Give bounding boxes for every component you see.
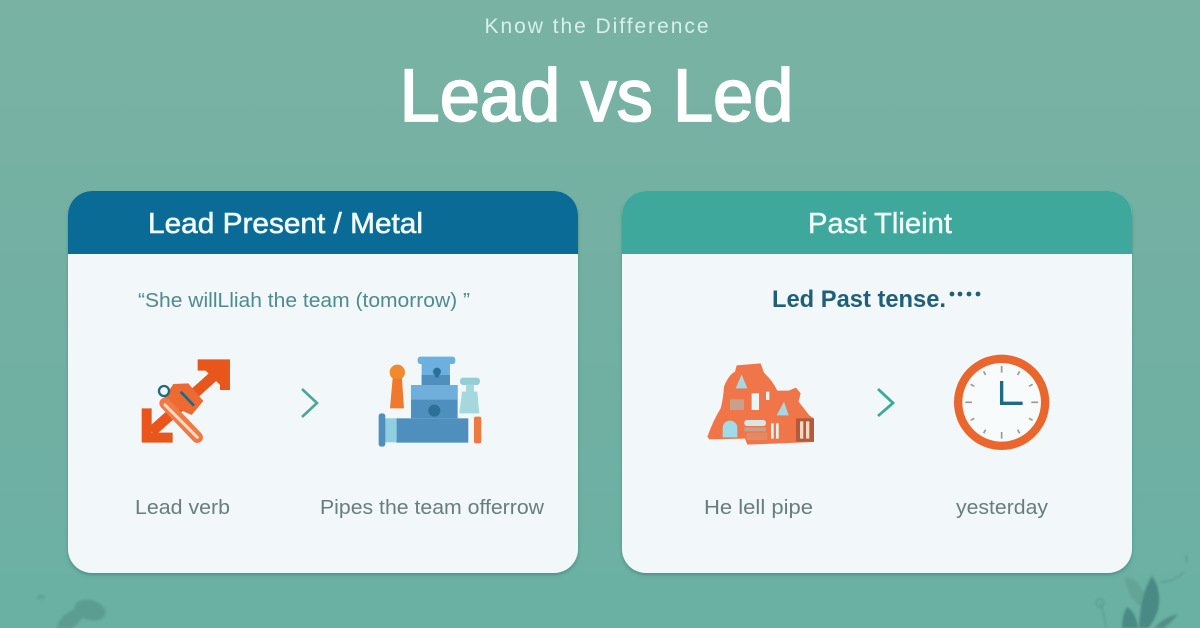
- label: yesterday: yesterday: [956, 497, 1048, 519]
- icon: wrench and arrows: [142, 359, 230, 443]
- decorative leaves: bottom right: [1096, 555, 1187, 628]
- card heading: Past Tlieint: [808, 208, 952, 240]
- card header band: [622, 191, 1132, 254]
- icon: house: [707, 363, 814, 445]
- card body: [68, 191, 578, 573]
- icon: clock: [954, 355, 1049, 450]
- panel: Led past tense: [622, 191, 1132, 573]
- eyebrow heading: Know the Difference: [484, 15, 708, 38]
- card body: [622, 191, 1132, 573]
- arrow: [878, 389, 893, 416]
- example sentence: “She willLliah the team (tomorrow) ”: [138, 290, 470, 312]
- card header band: [68, 191, 578, 254]
- label: lead verb: Lead verb: [135, 497, 230, 519]
- example sentence: Led Past tense.: [772, 286, 946, 313]
- panel: Lead present / metal: [68, 191, 578, 573]
- label: he led pipe: He lell pipe: [704, 497, 813, 519]
- label: pipes: Pipes the team offerrow: [320, 497, 545, 519]
- icon: pipes: [379, 357, 481, 447]
- card heading: Lead Present / Metal: [148, 208, 423, 240]
- decorative leaves: bottom left: [37, 594, 108, 628]
- arrow: [302, 389, 317, 417]
- title: Lead vs Led: [400, 54, 794, 137]
